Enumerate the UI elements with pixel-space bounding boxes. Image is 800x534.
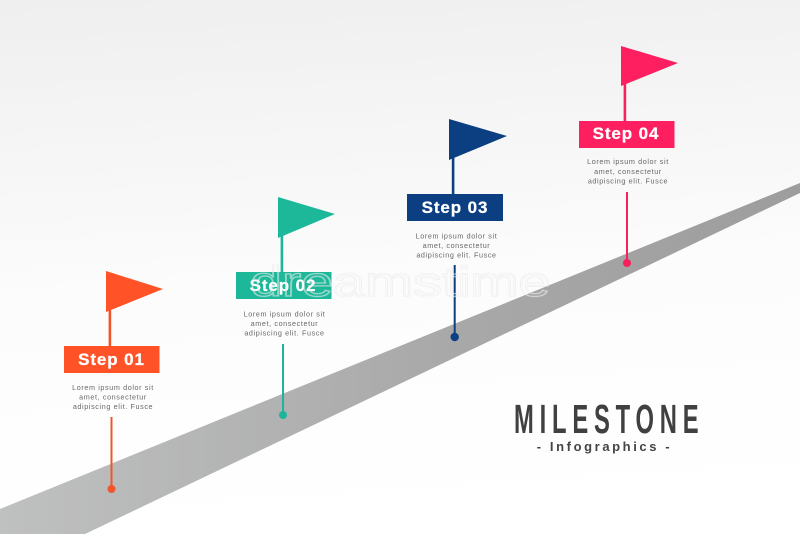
title: milestone: MILESTONE	[514, 398, 704, 443]
text: step 03 description: adipiscing elit. Fusce	[416, 250, 497, 260]
title block	[514, 398, 704, 454]
step 03 milestone	[407, 119, 507, 341]
subtitle: infographics: - Infographics -	[537, 439, 672, 454]
road	[0, 183, 800, 534]
marker: step 02	[279, 344, 287, 419]
marker: step 04	[623, 192, 631, 267]
label: step 03: Step 03	[422, 198, 488, 217]
flag: step 04	[621, 46, 678, 123]
text: step 04 description: adipiscing elit. Fusce	[588, 176, 668, 186]
label: step 04: Step 04	[593, 124, 659, 143]
marker: step 01	[108, 417, 116, 493]
step 01 milestone	[64, 271, 163, 493]
text: step 01 description: adipiscing elit. Fusce	[73, 402, 153, 411]
label: step 02: Step 02	[250, 276, 316, 295]
flag: step 03	[449, 119, 507, 196]
watermark: dreamstime	[250, 258, 550, 305]
label: step 03	[407, 194, 503, 221]
marker: step 03	[450, 265, 459, 341]
text: step 04 description: amet, consectetur	[594, 167, 662, 176]
text: step 01 description: Lorem ipsum dolor sit	[72, 383, 154, 392]
label: step 02	[236, 272, 332, 299]
text: step 03 description: amet, consectetur	[423, 241, 490, 250]
text: step 02 description: amet, consectetur	[251, 319, 318, 328]
step 02 milestone	[236, 197, 335, 419]
text: step 04 description: Lorem ipsum dolor sit	[587, 157, 669, 166]
watermark: dreamstime	[250, 258, 550, 305]
step 04 milestone	[579, 46, 678, 267]
text: step 02 description: Lorem ipsum dolor sit	[244, 310, 325, 318]
label: step 04	[579, 121, 674, 148]
label: step 01: Step 01	[78, 350, 145, 369]
flag: step 01	[106, 271, 163, 348]
label: step 01	[64, 346, 160, 373]
text: step 03 description: Lorem ipsum dolor sit	[416, 232, 497, 240]
flag: step 02	[278, 197, 335, 274]
text: step 02 description: adipiscing elit. Fusce	[244, 328, 325, 338]
text: step 01 description: amet, consectetur	[79, 392, 147, 402]
